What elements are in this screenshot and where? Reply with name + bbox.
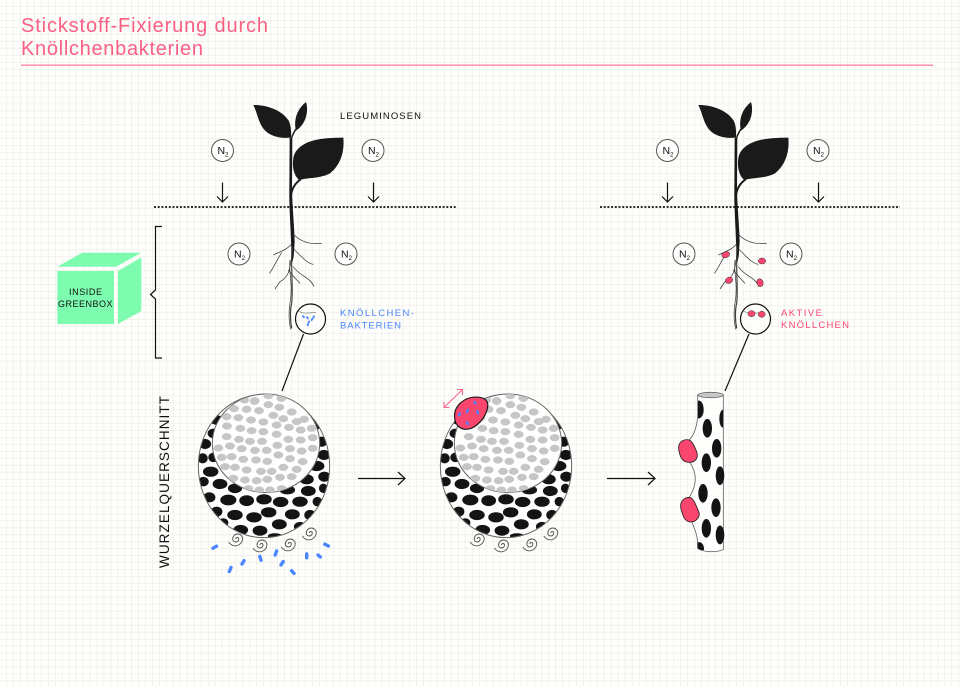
title: Stickstoff-Fixierung durch <box>21 15 268 37</box>
panel: root cross-section with nodule <box>440 390 572 552</box>
panel: plant after fixation <box>600 102 900 391</box>
arrows: nitrogen into soil <box>217 182 379 202</box>
bacteria <box>213 544 328 573</box>
heading: Wurzelquerschnitt: WURZELQUERSCHNITT <box>157 396 172 568</box>
cross-section cells <box>440 393 572 538</box>
root hairs <box>470 528 558 552</box>
panel: plant before fixation <box>154 102 456 391</box>
label: Leguminosen: LEGUMINOSEN <box>340 111 421 122</box>
root hairs <box>229 528 316 552</box>
panel: root cross-section with bacteria <box>198 393 330 573</box>
label: Knöllchenbakterien: BAKTERIEN <box>340 320 401 332</box>
arrow: expansion <box>444 390 462 408</box>
soil line <box>600 206 900 208</box>
label: Knöllchenbakterien <box>340 308 414 332</box>
root cells <box>698 401 724 550</box>
soil line <box>154 206 456 208</box>
icon: Inside Greenbox cube: GREENBOX <box>58 299 112 309</box>
label: aktive Knöllchen: KNÖLLCHEN <box>781 320 849 331</box>
root nodules <box>721 251 766 287</box>
nitrogen labels <box>656 140 829 265</box>
active nodules <box>679 440 699 522</box>
title: Knöllchenbakterien <box>21 38 203 60</box>
arrow: step two <box>607 472 655 485</box>
lens: bacteria on root <box>282 304 326 391</box>
root outline <box>689 395 723 552</box>
arrows: nitrogen into soil <box>662 182 824 202</box>
label: Knöllchenbakterien: KNÖLLCHEN- <box>340 308 414 319</box>
icon: Inside Greenbox cube <box>57 253 141 324</box>
root top <box>698 392 723 398</box>
lens: active nodules <box>725 304 770 391</box>
label: aktive Knöllchen <box>781 308 849 331</box>
growing nodule <box>454 397 488 429</box>
plant: legume with roots <box>253 102 344 329</box>
panel: root with active nodules <box>679 392 724 552</box>
bracket <box>150 226 162 358</box>
plant: legume with active nodules <box>698 102 789 329</box>
title <box>21 15 268 60</box>
icon: Inside Greenbox cube: INSIDE <box>69 287 102 297</box>
nitrogen labels <box>212 140 384 265</box>
label: aktive Knöllchen: AKTIVE <box>781 308 822 319</box>
cross-section cells <box>198 393 330 538</box>
arrow: step one <box>358 472 405 485</box>
